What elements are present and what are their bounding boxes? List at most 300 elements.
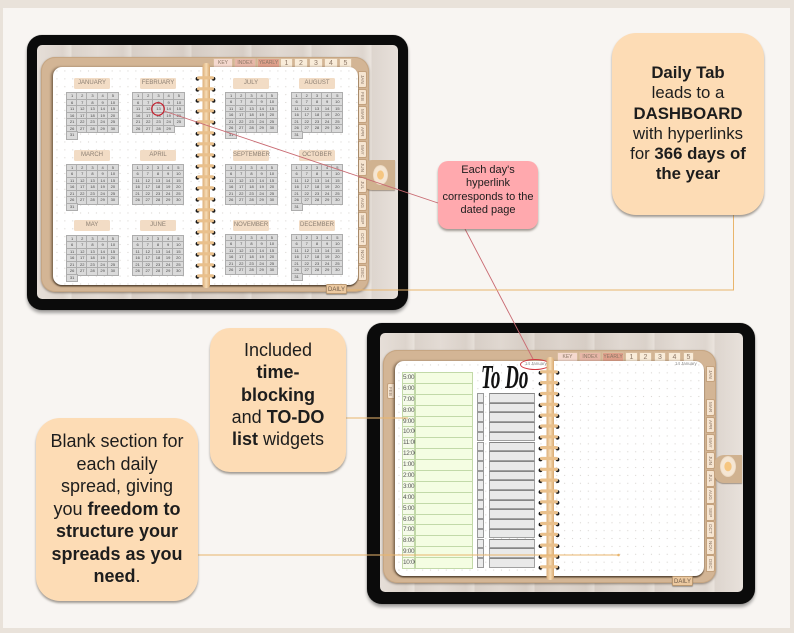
November calendar: 28 (249, 267, 254, 272)
time-blocking widget: 3:00 (403, 483, 414, 490)
June calendar: 19 (166, 255, 170, 260)
November calendar: 12 (239, 248, 244, 253)
April calendar: 29 (166, 197, 170, 202)
February calendar: 20 (177, 113, 181, 118)
January calendar: 18 (90, 113, 95, 118)
November calendar: 4 (261, 234, 263, 240)
May calendar: 28 (90, 268, 95, 273)
September calendar: 11 (229, 178, 233, 183)
planner page (395, 361, 704, 576)
February side tab: FEB (388, 387, 393, 395)
July calendar: 17 (239, 112, 244, 117)
December calendar: 8 (316, 241, 318, 246)
May calendar: 7 (81, 242, 83, 247)
July calendar: 3 (250, 92, 253, 98)
right page date: 14 January (675, 361, 697, 366)
February calendar: 10 (177, 100, 181, 105)
month tabs: SEP (708, 508, 713, 517)
April calendar: 13 (156, 178, 160, 183)
July calendar: 31 (229, 132, 233, 137)
September calendar: 17 (239, 184, 244, 189)
top tabs: YEARLY (259, 60, 278, 66)
March label: MARCH (81, 152, 103, 158)
February calendar: 3 (157, 93, 160, 98)
month tabs (706, 366, 715, 572)
June calendar: 6 (136, 242, 139, 247)
February calendar: 16 (136, 113, 140, 118)
tablet: daily page (367, 323, 755, 604)
October calendar: 31 (294, 204, 299, 209)
August calendar: 15 (335, 106, 340, 111)
July calendar: 9 (261, 99, 263, 104)
December calendar: 25 (335, 261, 340, 266)
time-blocking widget: 10:00 (403, 559, 418, 566)
time-blocking widget: 5:00 (403, 374, 414, 381)
December calendar: 11 (295, 248, 299, 253)
June calendar: 11 (136, 249, 140, 254)
month tabs: JUN (708, 456, 713, 465)
callout: blank section: spread, giving (61, 476, 173, 496)
March calendar: 23 (90, 191, 95, 196)
wood screen background (380, 333, 743, 592)
December calendar: 14 (325, 248, 329, 253)
March calendar: 17 (80, 184, 84, 189)
July calendar: 27 (239, 125, 244, 130)
arrow: blank section callout (198, 554, 618, 556)
December calendar: 10 (335, 241, 340, 246)
tablet: yearly dashboard (27, 35, 408, 310)
May calendar: 29 (100, 268, 105, 273)
January calendar: 27 (80, 126, 84, 131)
September calendar: 6 (230, 171, 232, 176)
April calendar: 26 (135, 197, 140, 202)
October calendar: 29 (325, 197, 329, 202)
October calendar: 12 (305, 178, 309, 183)
arrow: calendar to note (164, 111, 438, 203)
August calendar: 23 (315, 119, 319, 124)
September calendar: 21 (229, 191, 233, 196)
October calendar: 1 (295, 164, 298, 170)
top tabs: 3 (658, 354, 662, 361)
daily tab (672, 576, 693, 586)
callout: daily tab: leads to a (652, 83, 724, 102)
August calendar: 27 (305, 125, 309, 130)
August calendar: 21 (294, 119, 299, 124)
August calendar: 4 (326, 92, 328, 98)
August calendar: 28 (315, 125, 319, 130)
February calendar: 19 (166, 113, 171, 118)
August label: AUGUST (304, 80, 330, 86)
callout: daily tab: DASHBOARD (633, 104, 743, 123)
June calendar: 13 (156, 249, 160, 254)
August calendar: 2 (306, 92, 308, 98)
November calendar: 13 (249, 248, 254, 253)
August calendar: 6 (295, 99, 298, 104)
January calendar: 26 (70, 126, 74, 131)
July calendar: 12 (239, 106, 244, 111)
June calendar: 16 (135, 255, 140, 260)
August calendar (291, 92, 343, 139)
To Do heading: To Do (481, 359, 528, 396)
April calendar: 30 (176, 197, 181, 202)
April calendar: 23 (156, 191, 160, 196)
daily tab: DAILY (328, 287, 345, 293)
January calendar: 10 (111, 100, 115, 105)
September calendar: 23 (249, 191, 254, 196)
August calendar: 13 (315, 106, 319, 111)
December calendar: 3 (316, 234, 318, 240)
August calendar: 19 (325, 112, 329, 117)
February calendar: 15 (177, 106, 181, 111)
month tabs: JAN (708, 370, 713, 378)
time-blocking widget: 6:00 (403, 385, 414, 392)
September calendar: 25 (270, 191, 274, 196)
June calendar: 24 (166, 262, 170, 267)
October calendar: 15 (335, 178, 340, 183)
March calendar: 10 (111, 171, 115, 176)
time-blocking widget: 4:00 (403, 494, 414, 501)
callout: hyperlink note: hyperlink (466, 177, 510, 189)
May calendar: 27 (80, 268, 84, 273)
June calendar: 18 (156, 255, 160, 260)
February side tab (387, 383, 395, 399)
April label: APRIL (149, 152, 167, 158)
callout: time-blocking widgets: and TO-DO (232, 407, 324, 427)
planner cover (41, 57, 369, 292)
December calendar: 12 (305, 248, 309, 253)
February calendar: 14 (166, 106, 171, 111)
April calendar: 24 (166, 191, 170, 196)
March calendar: 12 (80, 178, 84, 183)
October calendar: 11 (295, 178, 299, 183)
callout: blank section: spreads as you (51, 544, 183, 564)
November calendar: 8 (250, 241, 253, 246)
March calendar: 8 (91, 171, 94, 176)
June calendar: 23 (156, 262, 160, 267)
July calendar: 13 (249, 106, 254, 111)
October calendar: 9 (326, 171, 328, 176)
January calendar: 20 (111, 113, 115, 118)
August calendar: 16 (294, 112, 299, 117)
January calendar: 31 (70, 132, 74, 137)
September calendar: 13 (249, 178, 254, 183)
November calendar: 29 (259, 267, 264, 272)
July calendar: 5 (271, 92, 273, 98)
September calendar: 2 (240, 164, 242, 170)
January calendar: 6 (71, 100, 73, 105)
September calendar: 8 (250, 171, 253, 176)
March calendar: 5 (112, 164, 114, 170)
callout: time-blocking widgets: blocking (241, 385, 315, 405)
December calendar: 29 (325, 267, 329, 272)
callout: daily tab: the year (656, 164, 720, 183)
month tabs: JAN (360, 75, 365, 84)
callout: time-blocking widgets: list widgets (232, 429, 324, 449)
July calendar (225, 92, 278, 139)
daily tab: DAILY (674, 579, 691, 585)
October calendar: 22 (305, 191, 309, 196)
July calendar: 4 (261, 92, 263, 98)
June calendar: 15 (176, 249, 181, 254)
November calendar: 3 (250, 234, 253, 240)
January calendar: 3 (91, 93, 94, 98)
February calendar: 1 (137, 93, 139, 98)
December calendar: 31 (294, 274, 299, 279)
month tabs: MAR (708, 402, 713, 413)
July calendar: 8 (250, 99, 253, 104)
August calendar: 1 (295, 92, 298, 98)
callout: daily tab: Daily Tab (651, 63, 725, 82)
November calendar: 14 (259, 248, 264, 253)
December label (299, 220, 335, 231)
May calendar: 21 (70, 262, 74, 267)
arrow: widgets callout (346, 417, 408, 419)
top tabs: INDEX (582, 354, 598, 360)
March calendar: 3 (91, 164, 94, 170)
February calendar: 27 (146, 126, 150, 131)
month tabs: OCT (708, 524, 713, 534)
September calendar: 3 (250, 164, 253, 170)
April label (140, 150, 176, 160)
June calendar: 8 (157, 242, 159, 247)
June calendar: 5 (177, 236, 179, 240)
May calendar: 8 (91, 242, 94, 247)
July calendar: 6 (230, 99, 232, 104)
April calendar: 9 (167, 171, 169, 176)
January calendar: 5 (112, 93, 114, 98)
September calendar: 22 (239, 191, 244, 196)
January calendar (66, 92, 119, 140)
June calendar: 3 (157, 236, 159, 240)
May calendar: 5 (112, 236, 114, 240)
December calendar: 16 (294, 254, 299, 259)
callout: blank section: you freedom to (53, 498, 181, 518)
April calendar: 3 (157, 164, 159, 170)
March calendar: 25 (111, 191, 115, 196)
January calendar: 28 (90, 126, 95, 131)
month tabs: APR (360, 127, 365, 137)
May calendar: 3 (91, 236, 94, 240)
August calendar: 17 (305, 112, 309, 117)
time-blocking widget: 7:00 (403, 526, 414, 533)
January calendar: 9 (102, 100, 104, 105)
December calendar: 4 (326, 234, 328, 240)
October calendar: 8 (316, 171, 318, 176)
April calendar: 27 (146, 197, 150, 202)
December calendar: 19 (325, 254, 329, 259)
November calendar: 7 (240, 241, 242, 246)
callout: time-blocking widgets: time- (256, 362, 300, 382)
March calendar: 22 (80, 191, 84, 196)
October calendar: 14 (325, 178, 329, 183)
time-blocking widget: 8:00 (403, 537, 414, 544)
March calendar: 28 (90, 197, 95, 202)
May calendar: 6 (71, 242, 73, 247)
May calendar: 22 (80, 262, 84, 267)
January calendar: 12 (80, 106, 84, 111)
November calendar: 25 (270, 261, 274, 266)
callout: hyperlink note: corresponds to the (442, 191, 534, 203)
September label: SEPTEMBER (233, 152, 270, 158)
July calendar: 26 (229, 125, 233, 130)
July calendar: 15 (270, 106, 274, 111)
highlight circle: February 14 (152, 103, 164, 115)
January calendar: 8 (91, 100, 94, 105)
May calendar: 31 (70, 275, 74, 280)
time-blocking widget: 5:00 (403, 505, 414, 512)
spiral binding (538, 357, 560, 580)
June calendar: 21 (135, 262, 140, 267)
June calendar: 10 (176, 242, 181, 247)
October calendar: 18 (315, 184, 319, 189)
February calendar: 17 (146, 113, 150, 118)
July calendar: 1 (230, 92, 232, 98)
November calendar: 11 (229, 248, 233, 253)
October calendar: 26 (294, 197, 299, 202)
October calendar: 4 (326, 164, 328, 170)
July calendar: 25 (270, 119, 274, 124)
January calendar: 23 (90, 119, 95, 124)
March calendar: 20 (111, 184, 115, 189)
February calendar: 7 (147, 100, 149, 105)
August calendar: 12 (305, 106, 309, 111)
time-blocking widget: 12:00 (403, 450, 418, 457)
June calendar: 26 (135, 268, 140, 273)
October calendar: 21 (294, 191, 299, 196)
January calendar: 19 (100, 113, 105, 118)
December calendar: 13 (315, 248, 319, 253)
August calendar: 14 (325, 106, 329, 111)
October calendar: 6 (295, 171, 298, 176)
December calendar: 18 (315, 254, 319, 259)
December calendar: 9 (326, 241, 328, 246)
May calendar: 23 (90, 262, 95, 267)
September calendar: 24 (259, 191, 264, 196)
October calendar: 2 (306, 164, 308, 170)
July calendar: 10 (270, 99, 274, 104)
March calendar: 14 (100, 178, 105, 183)
top tabs: 2 (299, 60, 303, 67)
planner page (53, 67, 358, 285)
top tabs: 1 (630, 354, 633, 361)
October calendar: 27 (305, 197, 309, 202)
April calendar: 25 (176, 191, 181, 196)
July calendar: 19 (259, 112, 264, 117)
arrow: daily tab to callout (347, 215, 734, 290)
month tabs (358, 71, 367, 281)
June calendar: 9 (167, 242, 169, 247)
June calendar: 25 (176, 262, 181, 267)
August calendar: 11 (295, 106, 299, 111)
November calendar: 20 (270, 254, 274, 259)
January calendar: 22 (80, 119, 84, 124)
top tabs (557, 352, 694, 361)
April calendar: 19 (166, 184, 170, 189)
December calendar (291, 234, 343, 281)
July calendar: 23 (249, 119, 254, 124)
August calendar: 30 (335, 125, 340, 130)
March calendar: 16 (70, 184, 74, 189)
May calendar: 18 (90, 255, 95, 260)
top tabs: KEY (562, 354, 572, 360)
August calendar: 5 (336, 92, 338, 98)
May calendar: 4 (102, 236, 104, 240)
August calendar: 26 (294, 125, 299, 130)
June calendar: 7 (147, 242, 149, 247)
December calendar: 28 (315, 267, 319, 272)
January calendar: 15 (111, 106, 115, 111)
October calendar: 23 (315, 191, 319, 196)
September calendar: 16 (229, 184, 233, 189)
month tabs: NOV (708, 541, 713, 551)
March calendar: 13 (90, 178, 95, 183)
July calendar: 20 (270, 112, 274, 117)
March calendar: 9 (102, 171, 104, 176)
September calendar (225, 164, 278, 205)
September calendar: 5 (271, 164, 273, 170)
April calendar: 8 (157, 171, 159, 176)
month tabs: AUG (360, 198, 365, 207)
November calendar: 21 (229, 261, 233, 266)
November calendar: 19 (259, 254, 264, 259)
April calendar: 7 (147, 171, 149, 176)
October calendar: 28 (315, 197, 319, 202)
month tabs: MAY (360, 145, 365, 154)
October calendar: 13 (315, 178, 319, 183)
October calendar: 3 (316, 164, 318, 170)
July calendar: 21 (229, 119, 233, 124)
August calendar: 7 (306, 99, 308, 104)
September calendar: 9 (261, 171, 263, 176)
March calendar: 19 (100, 184, 105, 189)
November calendar: 30 (270, 267, 274, 272)
top tabs: KEY (218, 60, 228, 66)
February calendar: 5 (178, 93, 180, 98)
January calendar: 2 (81, 93, 83, 98)
July calendar: 16 (229, 112, 233, 117)
December calendar: 30 (335, 267, 340, 272)
April calendar: 10 (176, 171, 181, 176)
December calendar: 21 (294, 261, 299, 266)
callout: blank section: each daily (76, 454, 158, 474)
March calendar: 4 (102, 164, 104, 170)
August calendar: 9 (326, 99, 328, 104)
April calendar: 1 (136, 164, 139, 170)
June calendar: 29 (166, 268, 170, 273)
wood screen background (37, 45, 398, 299)
month tabs: JUL (708, 474, 713, 482)
November calendar: 2 (240, 234, 242, 240)
July calendar: 29 (259, 125, 264, 130)
callout: blank section: need. (93, 566, 141, 586)
May calendar: 26 (70, 268, 74, 273)
top tabs: INDEX (237, 60, 253, 66)
September calendar: 7 (240, 171, 242, 176)
top tabs: 2 (644, 354, 647, 361)
September calendar: 12 (239, 178, 244, 183)
month tabs: JUN (360, 163, 365, 172)
February calendar: 2 (147, 93, 149, 98)
April calendar: 14 (166, 178, 170, 183)
February calendar: 11 (136, 106, 140, 111)
March calendar: 6 (71, 171, 73, 176)
September calendar: 4 (261, 164, 263, 170)
February calendar: 24 (166, 119, 171, 124)
March calendar: 2 (81, 164, 83, 170)
March calendar: 7 (81, 171, 83, 176)
May calendar: 24 (100, 262, 105, 267)
April calendar: 16 (135, 184, 140, 189)
